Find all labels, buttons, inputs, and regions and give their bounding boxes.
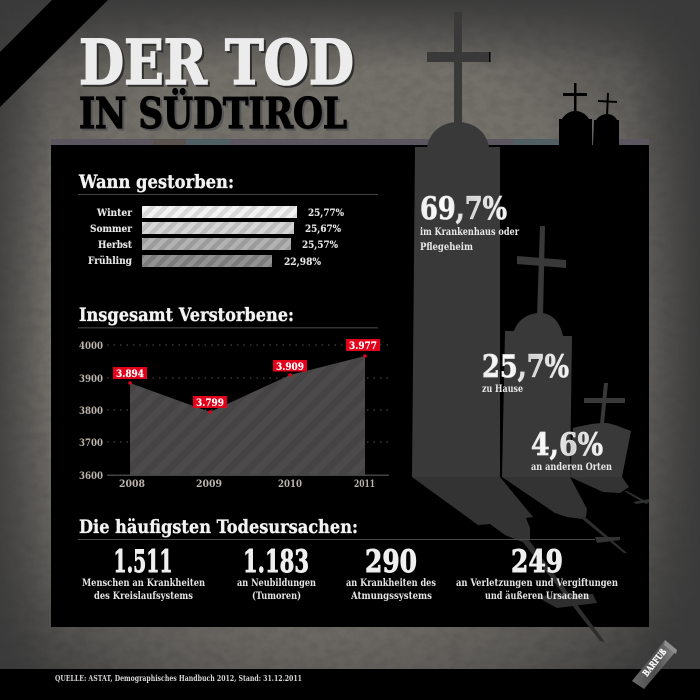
cause: Kreislaufsystem: Menschen an Krankheiten: [82, 578, 206, 589]
area chart: 2009: [196, 478, 222, 490]
cause: Verletzungen: an Verletzungen und Vergiftungen: [456, 578, 619, 589]
black main panel: [51, 145, 649, 627]
data label 2010: 3.909: [276, 362, 304, 373]
cross shadows outside panel: [578, 627, 609, 643]
logo: Barfuss tube: [632, 640, 677, 689]
tombstone: medium 25.7%: [502, 226, 627, 553]
area chart: 3700: [79, 437, 103, 449]
tombstone: small 4.6%: [570, 383, 649, 504]
section: Die häufigsten Todesursachen: [78, 517, 619, 602]
cause: Neubildungen: an Neubildungen: [237, 578, 317, 589]
cause: Verletzungen: [456, 544, 619, 602]
stat: 69,7%: im Krankenhaus oder: [420, 227, 520, 238]
section: Wann gestorben: [78, 172, 378, 268]
stat: 25,7%: [482, 349, 569, 395]
title: DER TOD: [81, 28, 356, 101]
small black tombstones on the horizon: [559, 83, 619, 146]
cause: Neubildungen: (Tumoren): [252, 591, 301, 602]
footer bar: [0, 669, 700, 700]
section: Insgesamt Verstorbene: [78, 305, 389, 490]
bar: Frühling: 22,98%: [284, 257, 321, 268]
area chart: 3800: [79, 405, 103, 417]
bar: Herbst: 25,57%: [302, 240, 338, 251]
stat: 69,7%: 69,7%: [420, 191, 507, 227]
stat: 69,7%: Pflegeheim: [420, 242, 473, 253]
area chart: [79, 339, 389, 490]
title: DER TOD: [79, 26, 354, 99]
cause: Verletzungen: und äußeren Ursachen: [485, 591, 590, 602]
bar: Winter: [96, 206, 344, 219]
bar: Herbst: Herbst: [98, 239, 132, 251]
heading: Wann gestorben: Wann gestorben:: [78, 172, 234, 193]
cause: Atmungssystem: an Krankheiten des: [346, 578, 436, 589]
heading: Insgesamt Verstorbene: Insgesamt Verstorbene:: [79, 305, 294, 326]
bar: Frühling: [88, 255, 321, 268]
bar: Frühling: Frühling: [88, 255, 133, 267]
data label 2008: 3.894: [116, 369, 144, 380]
bar: Sommer: Sommer: [90, 223, 132, 235]
cause: Kreislaufsystem: [82, 544, 206, 602]
title: IN SÜDTIROL: [81, 89, 349, 140]
area chart: 2011: [354, 478, 375, 490]
data label 2011: 3.977: [349, 341, 377, 352]
cause: Kreislaufsystem: 1.511: [114, 544, 172, 580]
coloured strip above panel: [51, 139, 649, 146]
area chart: 4000: [79, 340, 103, 352]
cause: Kreislaufsystem: des Kreislaufsystems: [94, 591, 193, 602]
bar: Winter: 25,77%: [308, 208, 344, 219]
cause: Atmungssystem: 290: [365, 544, 417, 580]
area chart: 2010: [278, 478, 302, 490]
data label 2009: 3.799: [196, 398, 224, 409]
cause: Neubildungen: [237, 544, 317, 602]
area chart: 3600: [79, 470, 103, 482]
cause: Neubildungen: 1.183: [243, 544, 309, 580]
cause: Atmungssystem: [346, 544, 436, 602]
title: IN SÜDTIROL: [79, 87, 347, 138]
source: QUELLE: ASTAT, Demographisches Handbuch 2012, Stand: 31.12.2011: [55, 673, 302, 683]
cause: Verletzungen: 249: [511, 544, 563, 580]
bar: Winter: Winter: [96, 207, 132, 219]
title: [79, 26, 356, 140]
area chart: 2008: [119, 478, 145, 490]
stat: 25,7%: 25,7%: [482, 349, 569, 385]
stat: 4,6%: 4,6%: [531, 427, 603, 463]
tombstone: large 69.7%: [412, 12, 605, 642]
heading: Die häufigsten Todesursachen: Die häufigsten Todesursachen:: [79, 517, 358, 538]
stat: 4,6%: an anderen Orten: [531, 462, 613, 473]
bar: Herbst: [98, 238, 338, 251]
mourning ribbon: [0, 0, 108, 107]
stat: 25,7%: zu Hause: [482, 384, 523, 395]
bar: Sommer: [90, 222, 341, 235]
area chart: 3900: [79, 373, 103, 385]
bar: Sommer: 25,67%: [305, 224, 341, 235]
logo: Barfuss tube: BARFUß: [641, 647, 669, 679]
cause: Atmungssystem: Atmungssystems: [350, 591, 432, 602]
stat: 69,7%: [420, 191, 520, 253]
